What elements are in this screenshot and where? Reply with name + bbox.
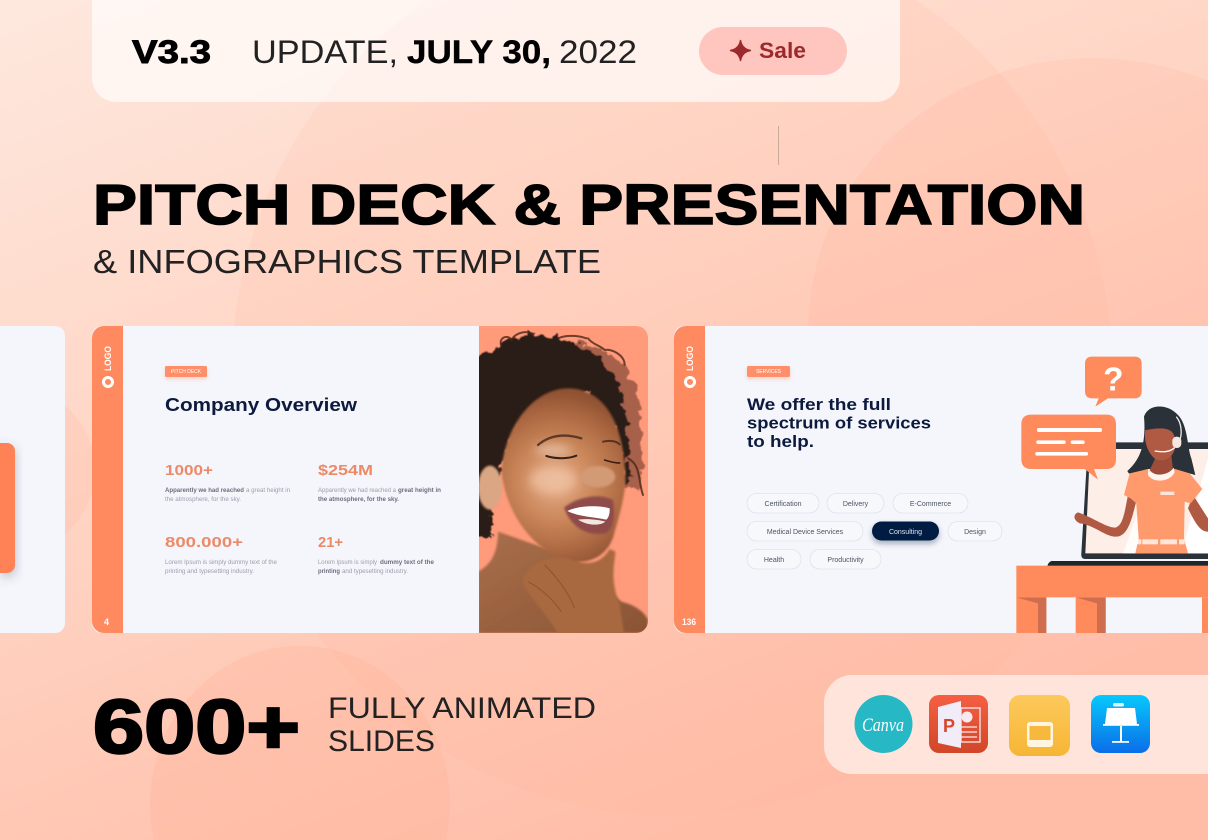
hand: [523, 549, 624, 633]
service pills: Medical Device Services: [767, 529, 844, 536]
uniform collar: [1148, 468, 1175, 481]
stat: 21+: 21+: [318, 534, 343, 551]
fully animated slides text: SLIDES: [328, 725, 435, 758]
tag: pitch deck: [165, 366, 207, 377]
stat: 21+: and typesetting industry.: [342, 569, 408, 575]
stat: $254M: the atmosphere, for the sky.: [318, 497, 399, 503]
top update banner: [92, 0, 900, 102]
agent arms: [1074, 495, 1208, 537]
tag: services: SERVICES: [756, 369, 782, 375]
service pills: Productivity: [827, 557, 864, 564]
stat: 21+: dummy text of the: [380, 560, 435, 566]
orange sidebar: LOGO: [685, 346, 695, 371]
photo: smiling woman: [471, 326, 648, 633]
neck and shoulders: [478, 532, 648, 633]
slide card: company overview: [92, 326, 479, 633]
stat: 800.000+: Lorem Ipsum is simply dummy text of the: [165, 560, 278, 566]
orange sidebar: 136: [682, 617, 696, 627]
stat: $254M: great height in: [398, 488, 441, 494]
speech bubble: message: [1021, 415, 1116, 480]
heading: company overview: Company Overview: [165, 395, 358, 415]
icon: powerpoint: [929, 695, 988, 753]
update date: 2022: [559, 34, 637, 70]
speech bubble: question: ?: [1103, 361, 1124, 398]
update date: JULY 30,: [407, 34, 551, 70]
stat: $254M: Apparently we had reached a: [318, 488, 397, 494]
stat: 1000+: 1000+: [165, 462, 213, 479]
icon: canva: [854, 695, 912, 753]
service pills: [747, 494, 1002, 569]
stat: 1000+: a great height in: [246, 488, 290, 494]
partial left slide card: [0, 326, 65, 633]
service pills: E-Commerce: [910, 501, 951, 508]
service pills: Design: [964, 529, 986, 536]
icon: powerpoint: P: [943, 716, 955, 736]
stat: 21+: [318, 534, 435, 575]
orange sidebar: 4: [104, 617, 109, 627]
service pills: Consulting: [889, 529, 922, 536]
big number 600+: 600+: [93, 685, 300, 770]
agent fringe: [1144, 416, 1176, 438]
orange sidebar: LOGO: [103, 346, 113, 371]
icon: canva: Canva: [862, 715, 904, 736]
fully animated slides text: FULLY ANIMATED: [328, 692, 596, 725]
stat: 1000+: [165, 462, 290, 503]
finger lines: [528, 565, 575, 612]
eyebrows and eyes: [538, 436, 620, 463]
orange sidebar: [92, 326, 123, 633]
stat: $254M: $254M: [318, 462, 373, 479]
cheek highlights: [530, 445, 576, 494]
sale badge: [699, 27, 847, 75]
agent hair back: [1127, 406, 1195, 475]
stat: 800.000+: 800.000+: [165, 534, 243, 551]
subtitle: & INFOGRAPHICS TEMPLATE: [93, 243, 601, 280]
stat: 1000+: Apparently we had reached: [165, 488, 244, 494]
heading: services: We offer the full: [747, 395, 891, 414]
orange sidebar: [674, 326, 705, 633]
desk: [1016, 566, 1208, 633]
agent face: [1145, 428, 1176, 460]
stat: 21+: Lorem Ipsum is simply: [318, 560, 377, 566]
fully animated slides text: [328, 692, 596, 758]
mouth: [564, 496, 614, 534]
stat: $254M: [318, 462, 441, 503]
heading: services: to help.: [747, 432, 814, 451]
laptop screen: [1081, 442, 1208, 559]
service pills: Delivery: [843, 501, 869, 508]
headset: [1155, 417, 1181, 452]
name badge and belt: [1135, 492, 1185, 544]
slide card: services: [674, 326, 1208, 633]
sale badge: Sale: [759, 38, 806, 63]
icon: keynote: [1091, 695, 1150, 753]
face: [501, 388, 626, 562]
tag: services: [747, 366, 790, 377]
heading: services: [747, 395, 931, 451]
service pills: Certification: [765, 501, 802, 508]
speech bubble: question: [1085, 357, 1142, 407]
thin vertical line: [778, 126, 779, 165]
ear: [478, 466, 502, 510]
main title: PITCH DECK & PRESENTATION: [93, 173, 1085, 237]
stat: 1000+: the atmosphere, for the sky.: [165, 497, 241, 503]
illustration: support agent at laptop: [1016, 357, 1208, 633]
nose: [581, 466, 615, 487]
laptop base: [1047, 561, 1208, 566]
curly hair: [471, 332, 643, 538]
service pills: Health: [764, 557, 784, 564]
heading: services: spectrum of services: [747, 414, 931, 432]
update date: UPDATE,: [252, 34, 398, 70]
agent uniform: [1124, 468, 1202, 553]
stat: 800.000+: printing and typesetting industry.: [165, 569, 254, 575]
version label: V3.3: [132, 34, 211, 70]
orange partial block: [0, 443, 15, 573]
app compatibility panel: [824, 675, 1208, 774]
tag: pitch deck: PITCH DECK: [171, 369, 202, 375]
agent neck: [1150, 455, 1173, 475]
stat: 21+: printing: [318, 569, 340, 575]
update date: [252, 34, 637, 70]
icon: google slides: [1009, 695, 1070, 756]
stat: 800.000+: [165, 534, 278, 575]
